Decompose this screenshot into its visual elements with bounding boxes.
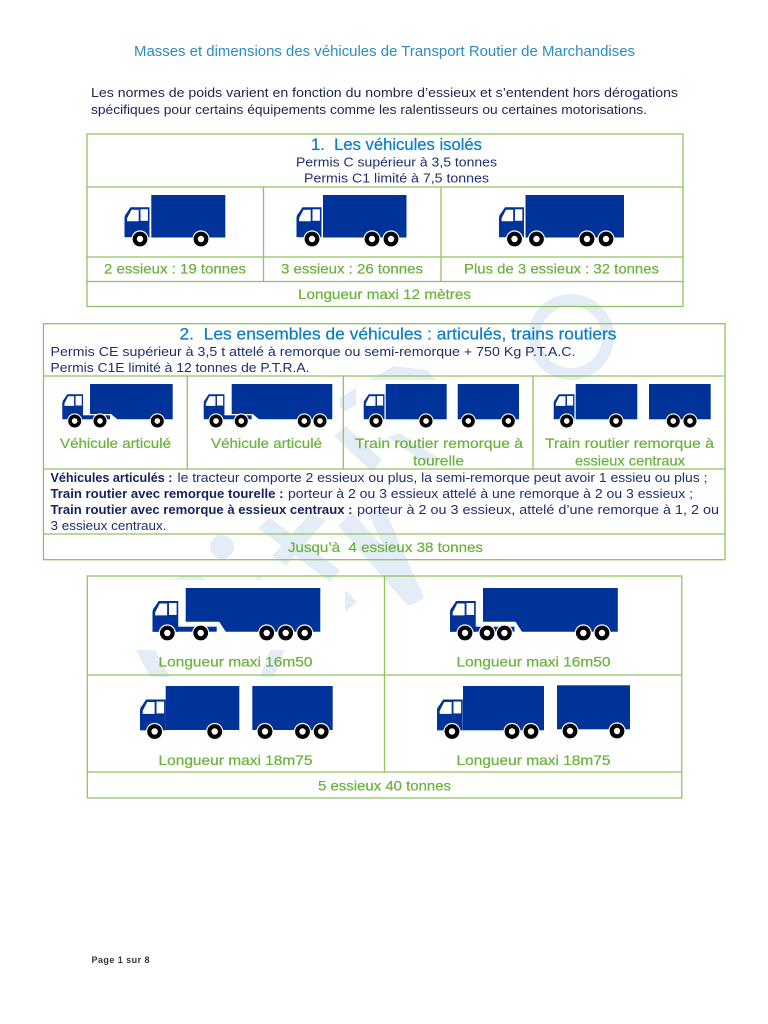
labels row 2 [158,752,611,768]
definitions text: 3 essieux centraux. [50,519,166,533]
icon: articulated vehicle 3 axles [55,380,180,430]
weight labels [104,260,659,276]
definitions text: Train routier avec remorque à essieux centraux : [50,503,352,517]
icon: road train 5 axles A [140,686,333,740]
vehicle labels [60,435,714,468]
heading 1: 1. Les véhicules isolés [311,136,482,154]
licence lines: Permis C1 limité à 7,5 tonnes [304,172,489,186]
title: Masses et dimensions des véhicules de Transport Routier de Marchandises [134,44,635,60]
vehicle labels: essieux centraux [575,452,685,468]
weight labels: Plus de 3 essieux : 32 tonnes [464,260,659,276]
vehicle labels: Véhicule articulé [60,435,171,451]
weight labels: 3 essieux : 26 tonnes [281,260,423,276]
icon: road train 5 axles B [437,685,630,740]
icon: articulated vehicle tri-axle trailer [138,582,333,642]
intro text: spécifiques pour certains équipements comme les ralentisseurs ou certaines motorisations. [91,102,647,117]
licence lines: Permis C supérieur à 3,5 tonnes [296,156,497,170]
heading 2: 2. Les ensembles de véhicules : articulés, trains routiers [180,326,616,344]
icon: road train with turret trailer [356,380,526,430]
length label: Longueur maxi 12 mètres [298,286,471,302]
definitions text: porteur à 2 ou 3 essieux attelé à une remorque à 2 ou 3 essieux ; [288,487,693,501]
panel: véhicules isolés [87,134,683,306]
licence lines [296,156,497,186]
definitions text: le tracteur comporte 2 essieux ou plus, la semi-remorque peut avoir 1 essieu ou plus ; [178,471,708,485]
icon: articulated vehicle 4 axles [196,380,340,430]
licence lines: Permis C1E limité à 12 tonnes de P.T.R.A. [50,361,310,375]
vehicle labels: Véhicule articulé [211,435,322,451]
icon: truck 4 axles [499,195,624,248]
definitions text: Train routier avec remorque tourelle : [50,487,284,501]
labels row 1: Longueur maxi 16m50 [158,654,313,670]
vehicle labels: Train routier remorque à [545,435,714,451]
weight label: Jusqu’à 4 essieux 38 tonnes [288,539,483,555]
vehicle labels: Train routier remorque à [355,435,523,451]
licence lines: Permis CE supérieur à 3,5 t attelé à remorque ou semi-remorque + 750 Kg P.T.A.C. [50,345,576,359]
labels row 2: Longueur maxi 18m75 [456,752,611,768]
icon: truck 3 axles [296,195,406,248]
panel: ensembles de véhicules [44,324,725,560]
intro text: Les normes de poids varient en fonction du nombre d’essieux et s’entendent hors dérogations [91,85,679,100]
icon: articulated vehicle tri-axle tractor [436,582,631,642]
definitions text: Véhicules articulés : [50,471,172,485]
icon: road train with central-axle trailer [546,380,718,430]
definitions text [50,471,719,533]
labels row 1: Longueur maxi 16m50 [456,654,611,670]
icon: truck 2 axles [124,195,225,248]
labels row 2: Longueur maxi 18m75 [158,752,313,768]
vehicle labels: tourelle [413,452,464,468]
labels row 1 [158,654,611,670]
footer page number: Page 1 sur 8 [92,955,150,965]
licence lines [50,345,576,375]
panel: 5 essieux [87,576,682,798]
weight label: 5 essieux 40 tonnes [318,778,451,794]
definitions text: porteur à 2 ou 3 essieux, attelé d’une remorque à 1, 2 ou [357,503,719,517]
intro text [91,85,679,117]
watermark logo [136,300,608,677]
weight labels: 2 essieux : 19 tonnes [104,260,246,276]
